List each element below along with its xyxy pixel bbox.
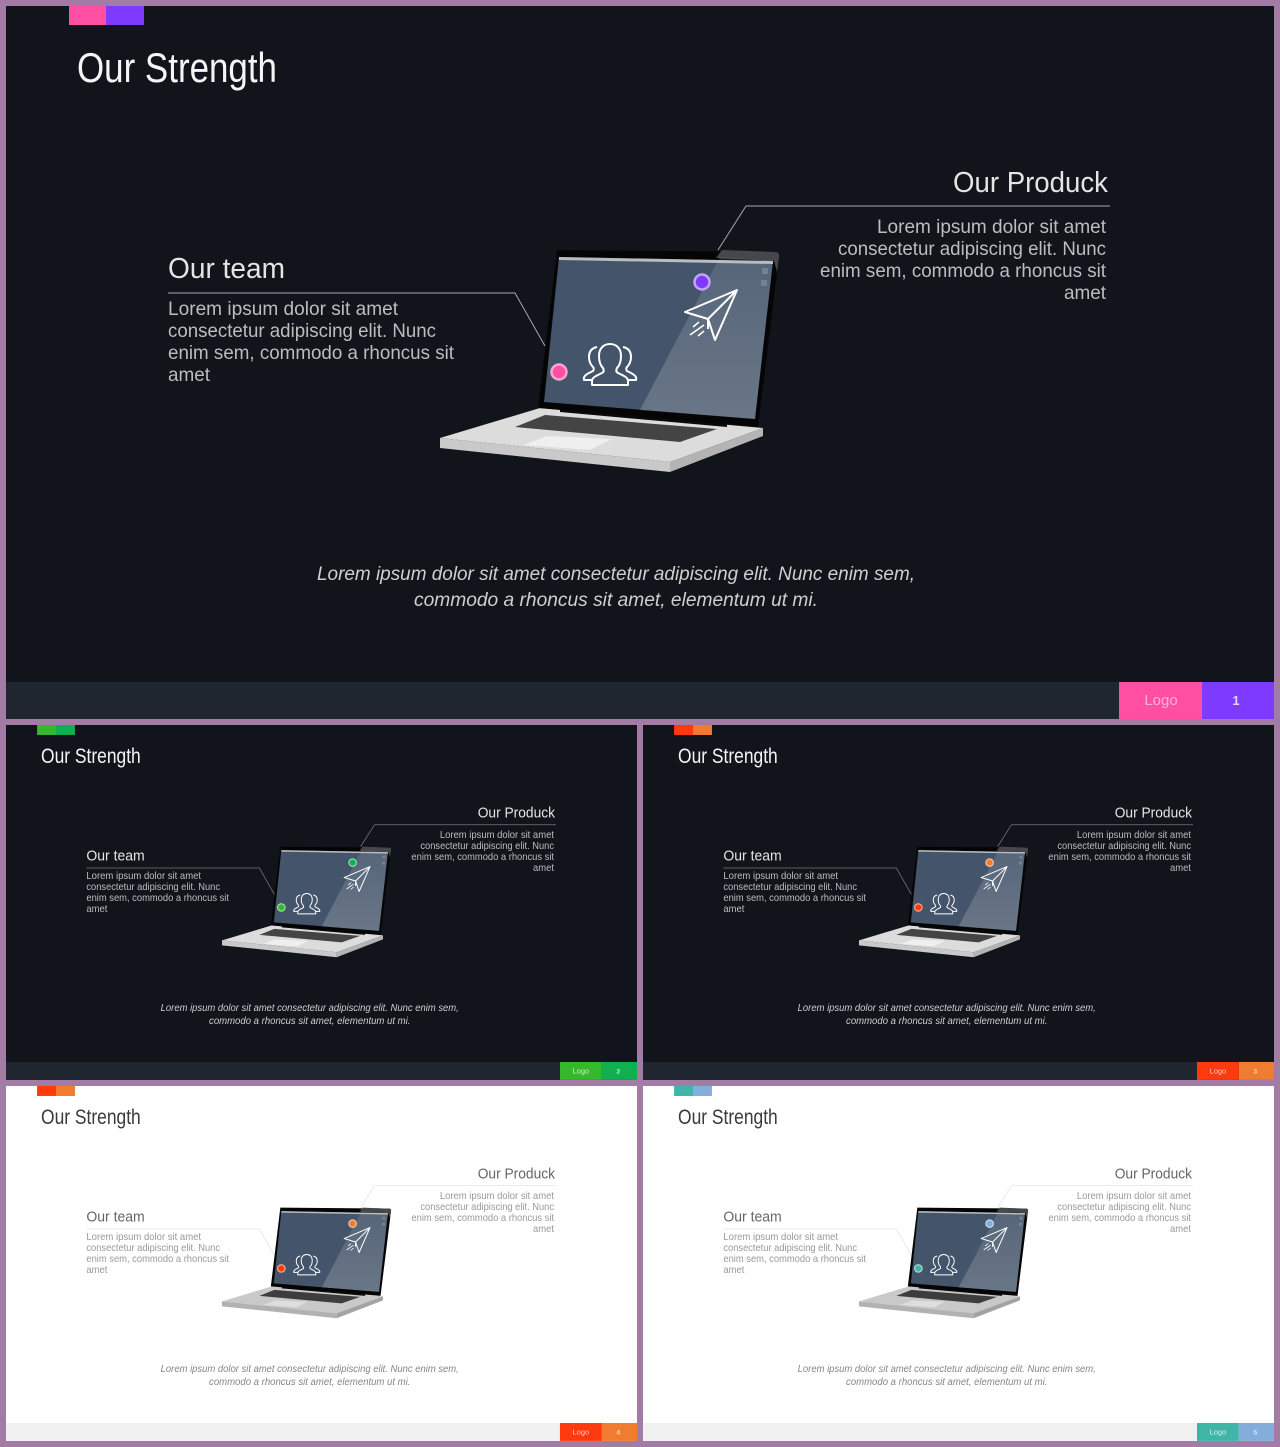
text block: our produck: Our Produck [1115,1167,1193,1183]
text block: our produck: amet [1170,1224,1191,1235]
leader line: team [723,1229,911,1255]
title: Our Strength [77,44,277,91]
laptop [859,1208,1028,1318]
accent tab [37,725,75,735]
text block: our produck: Our Produck [478,806,556,822]
footer page number: 4 [617,1429,621,1436]
text block: our team [86,849,229,915]
footer page number [602,1062,637,1080]
text block: our team: consectetur adipiscing elit. Nunc [723,882,857,893]
leader line: product [998,1186,1193,1208]
text block: our produck: enim sem, commodo a rhoncus sit [1048,852,1191,863]
slide background [6,725,637,1080]
text block: our team: amet [723,1265,745,1276]
text block: our team: amet [723,904,745,915]
title: Our Strength [678,745,778,768]
marker: product dot [986,859,993,866]
accent tab [69,6,144,25]
leader line: team [86,1229,274,1255]
marker: product dot [986,1220,993,1227]
footer logo block: Logo [1210,1427,1226,1436]
text block: our team: Lorem ipsum dolor sit amet [86,1232,201,1243]
laptop [222,847,391,957]
text block: our team: Our team [723,849,782,865]
text block: our produck: Lorem ipsum dolor sit amet [877,216,1107,238]
italic caption [161,1364,459,1388]
text block: our produck: consectetur adipiscing elit. Nunc [838,238,1106,260]
panel: red dark slide [643,725,1274,1080]
panel: teal light slide [643,1086,1274,1441]
text block: our produck [820,167,1108,304]
text block: our produck: Our Produck [953,167,1108,199]
marker: team dot [915,904,922,911]
text block: our produck [1048,806,1193,874]
panel: main dark slide [6,6,1274,719]
footer page number: 3 [1254,1068,1258,1075]
italic caption: commodo a rhoncus sit amet, elementum ut mi. [209,1016,410,1027]
footer logo block: Logo [573,1066,589,1075]
italic caption: commodo a rhoncus sit amet, elementum ut mi. [846,1377,1047,1388]
text block: our team: enim sem, commodo a rhoncus sit [723,893,866,904]
italic caption: Lorem ipsum dolor sit amet consectetur adipiscing elit. Nunc enim sem, [798,1364,1096,1375]
italic caption [161,1003,459,1027]
italic caption: commodo a rhoncus sit amet, elementum ut mi. [209,1377,410,1388]
text block: our produck: amet [533,863,554,874]
laptop [440,250,779,472]
marker: team dot [552,364,566,380]
text block: our team [723,1210,866,1276]
text block: our produck [1048,1167,1193,1235]
footer logo block [1197,1423,1239,1441]
marker: product dot [349,1220,356,1227]
title: Our Strength [678,1106,778,1129]
footer logo block [1119,682,1202,719]
text block: our produck: amet [1064,282,1107,304]
footer logo block [1197,1062,1239,1080]
slide background [643,1086,1274,1441]
slide background [6,1086,637,1441]
marker: team dot [278,1265,285,1272]
footer page number: 2 [617,1068,621,1075]
text block: our team: Our team [86,1210,145,1226]
footer logo block: Logo [573,1427,589,1436]
text block: our team: Our team [86,849,145,865]
italic caption: commodo a rhoncus sit amet, elementum ut mi. [414,589,818,611]
footer bar [643,1062,1274,1080]
leader line: product [361,1186,556,1208]
panel: red light slide [6,1086,637,1441]
accent tab [674,725,712,735]
footer bar [6,1423,637,1441]
leader line: product [718,206,1110,250]
text block: our produck: consectetur adipiscing elit. Nunc [420,841,554,852]
title: Our Strength [41,745,141,768]
text block: our produck: consectetur adipiscing elit. Nunc [1057,841,1191,852]
footer logo block [560,1423,602,1441]
text block: our produck: Lorem ipsum dolor sit amet [1077,830,1191,841]
italic caption [317,563,915,611]
accent tab [37,1086,75,1096]
laptop [859,847,1028,957]
text block: our team: Lorem ipsum dolor sit amet [86,871,201,882]
text block: our produck: enim sem, commodo a rhoncus sit [1048,1213,1191,1224]
footer page number [602,1423,637,1441]
text block: our team: enim sem, commodo a rhoncus sit [86,1254,229,1265]
footer logo block: Logo [1210,1066,1226,1075]
text block: our produck: amet [533,1224,554,1235]
text block: our produck: consectetur adipiscing elit. Nunc [1057,1202,1191,1213]
text block: our team: consectetur adipiscing elit. Nunc [723,1243,857,1254]
text block: our team: consectetur adipiscing elit. Nunc [168,320,436,342]
footer page number [1239,1423,1274,1441]
text block: our produck: amet [1170,863,1191,874]
italic caption: commodo a rhoncus sit amet, elementum ut mi. [846,1016,1047,1027]
text block: our team: amet [86,1265,108,1276]
footer bar [6,682,1274,719]
text block: our team [723,849,866,915]
laptop [222,1208,391,1318]
text block: our team: Lorem ipsum dolor sit amet [723,1232,838,1243]
leader line: team [168,293,545,346]
footer bar [6,1062,637,1080]
italic caption: Lorem ipsum dolor sit amet consectetur adipiscing elit. Nunc enim sem, [317,563,915,585]
leader line: team [723,868,911,894]
text block: our produck: Lorem ipsum dolor sit amet [1077,1191,1191,1202]
text block: our team: Lorem ipsum dolor sit amet [723,871,838,882]
text block: our produck [411,1167,556,1235]
text block: our team: enim sem, commodo a rhoncus sit [723,1254,866,1265]
text block: our team [168,253,455,386]
text block: our produck: consectetur adipiscing elit. Nunc [420,1202,554,1213]
marker: product dot [694,274,710,290]
text block: our produck [411,806,556,874]
text block: our produck: enim sem, commodo a rhoncus sit [411,852,554,863]
text block: our team [86,1210,229,1276]
text block: our team: Our team [723,1210,782,1226]
text block: our produck: enim sem, commodo a rhoncus sit [820,260,1107,282]
italic caption: Lorem ipsum dolor sit amet consectetur adipiscing elit. Nunc enim sem, [161,1364,459,1375]
text block: our team: consectetur adipiscing elit. Nunc [86,1243,220,1254]
footer logo block [560,1062,602,1080]
leader line: product [998,825,1193,847]
text block: our team: Lorem ipsum dolor sit amet [168,298,399,320]
footer page number [1202,682,1274,719]
slide background [6,6,1274,719]
italic caption: Lorem ipsum dolor sit amet consectetur adipiscing elit. Nunc enim sem, [161,1003,459,1014]
text block: our produck: Our Produck [478,1167,556,1183]
text block: our team: consectetur adipiscing elit. Nunc [86,882,220,893]
footer bar [643,1423,1274,1441]
italic caption [798,1003,1096,1027]
text block: our produck: Our Produck [1115,806,1193,822]
footer logo block: Logo [1144,692,1178,709]
marker: team dot [278,904,285,911]
text block: our produck: enim sem, commodo a rhoncus sit [411,1213,554,1224]
leader line: product [361,825,556,847]
italic caption [798,1364,1096,1388]
footer page number: 5 [1254,1429,1258,1436]
text block: our team: amet [168,364,211,386]
marker: team dot [915,1265,922,1272]
title: Our Strength [41,1106,141,1129]
text block: our team: amet [86,904,108,915]
marker: product dot [349,859,356,866]
text block: our produck: Lorem ipsum dolor sit amet [440,830,554,841]
footer page number: 1 [1232,693,1240,708]
text block: our produck: Lorem ipsum dolor sit amet [440,1191,554,1202]
text block: our team: enim sem, commodo a rhoncus sit [168,342,455,364]
italic caption: Lorem ipsum dolor sit amet consectetur adipiscing elit. Nunc enim sem, [798,1003,1096,1014]
leader line: team [86,868,274,894]
panel: green dark slide [6,725,637,1080]
footer page number [1239,1062,1274,1080]
text block: our team: Our team [168,253,285,285]
accent tab [674,1086,712,1096]
text block: our team: enim sem, commodo a rhoncus sit [86,893,229,904]
slide background [643,725,1274,1080]
